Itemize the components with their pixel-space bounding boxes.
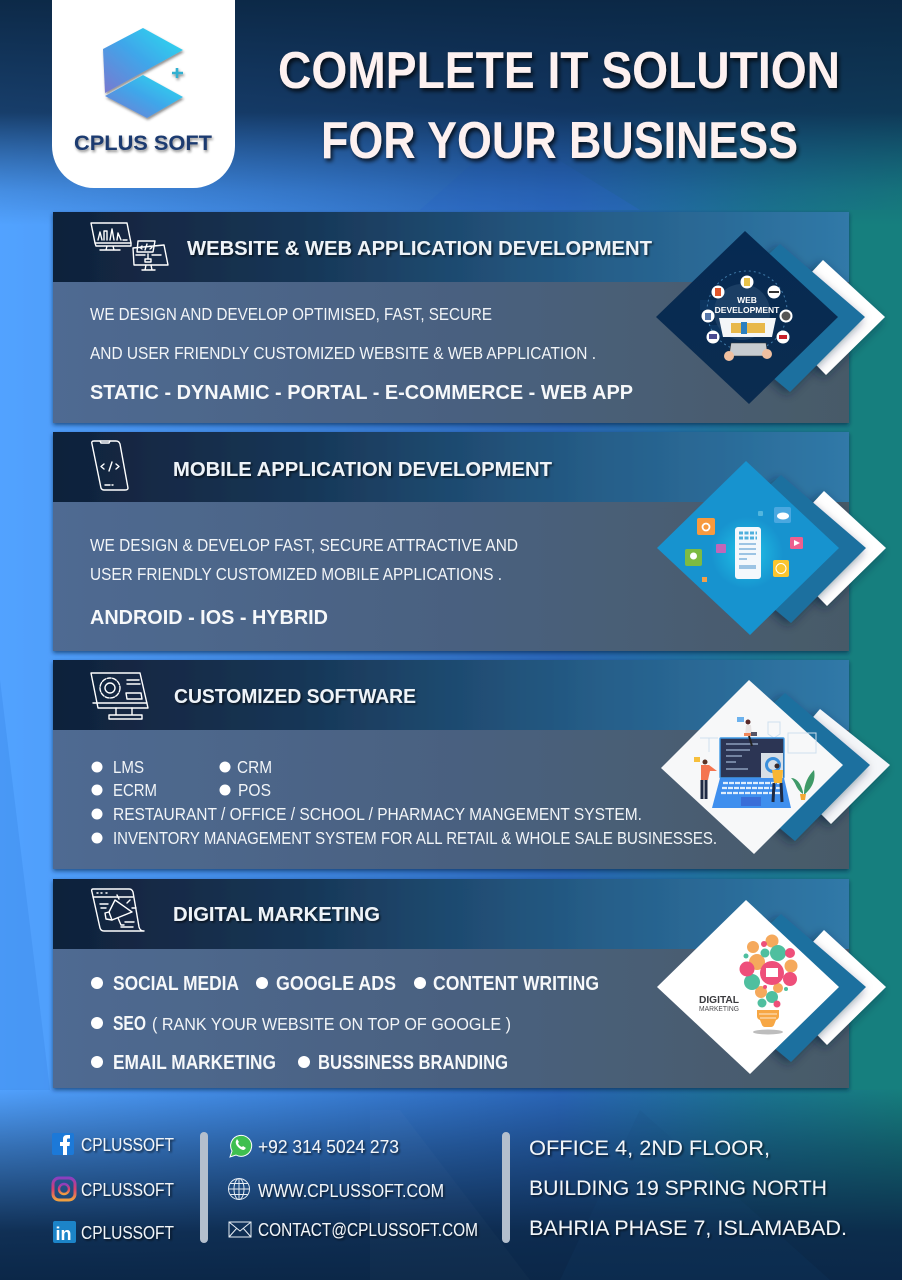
heading: DIGITAL MARKETING <box>173 904 380 926</box>
description: WE DESIGN & DEVELOP FAST, SECURE ATTRACTIVE AND <box>90 535 518 555</box>
software list: RESTAURANT / OFFICE / SCHOOL / PHARMACY MANGEMENT SYSTEM. <box>113 804 642 824</box>
footer: address: OFFICE 4, 2ND FLOOR, <box>529 1137 770 1160</box>
heading: WEBSITE & WEB APPLICATION DEVELOPMENT <box>187 238 652 260</box>
icon: linkedin: in <box>56 1224 72 1244</box>
description: AND USER FRIENDLY CUSTOMIZED WEBSITE & WEB APPLICATION . <box>90 343 596 363</box>
panel background <box>53 660 849 869</box>
software list: CRM <box>237 757 272 777</box>
logo wordmark: CPLUS SOFT <box>74 132 212 155</box>
divider left <box>200 1132 208 1243</box>
logo mark <box>103 28 183 118</box>
marketing services: GOOGLE ADS <box>276 973 396 995</box>
service list: STATIC - DYNAMIC - PORTAL - E-COMMERCE - WEB APP <box>90 382 633 404</box>
software list: ECRM <box>113 780 157 800</box>
panel: customized software <box>53 660 890 869</box>
diamond: web development: DEVELOPMENT <box>715 305 780 315</box>
software list: POS <box>238 780 271 800</box>
icon: facebook <box>52 1133 74 1155</box>
title: COMPLETE IT SOLUTION <box>278 42 840 100</box>
icon: envelope <box>229 1222 251 1237</box>
icon: software monitor <box>91 673 148 719</box>
footer: address <box>529 1137 847 1240</box>
marketing services <box>91 973 599 1074</box>
diamond: digital marketing bulb: DIGITAL <box>699 995 739 1006</box>
diamond: mobile apps <box>657 461 886 635</box>
heading: CUSTOMIZED SOFTWARE <box>174 686 416 708</box>
description <box>90 535 518 584</box>
text: facebook: CPLUSSOFT <box>81 1134 174 1155</box>
text: linkedin: CPLUSSOFT <box>81 1222 174 1243</box>
marketing services: BUSSINESS BRANDING <box>318 1052 508 1074</box>
footer: contact details <box>228 1135 478 1240</box>
diamond: digital marketing bulb <box>657 900 886 1074</box>
diamond: web development <box>656 231 885 404</box>
diamond: digital marketing bulb: MARKETING <box>699 1004 739 1013</box>
title <box>278 42 840 170</box>
description <box>90 304 596 363</box>
panel: digital marketing <box>53 879 886 1088</box>
footer: address: BAHRIA PHASE 7, ISLAMABAD. <box>529 1217 847 1240</box>
text: website: WWW.CPLUSSOFT.COM <box>258 1180 444 1201</box>
text: instagram: CPLUSSOFT <box>81 1179 174 1200</box>
description: WE DESIGN AND DEVELOP OPTIMISED, FAST, SECURE <box>90 304 492 324</box>
software list: INVENTORY MANAGEMENT SYSTEM FOR ALL RETAIL & WHOLE SALE BUSINESSES. <box>113 828 717 848</box>
divider right <box>502 1132 510 1243</box>
heading: MOBILE APPLICATION DEVELOPMENT <box>173 459 552 481</box>
icon: monitors <box>91 223 168 270</box>
marketing services: SEO <box>113 1013 146 1035</box>
software list: LMS <box>113 757 144 777</box>
platform list: ANDROID - IOS - HYBRID <box>90 607 328 629</box>
panel: mobile application development <box>53 432 886 651</box>
diamond: web development: WEB <box>737 295 757 305</box>
marketing services: EMAIL MARKETING <box>113 1052 276 1074</box>
marketing services: ( RANK YOUR WEBSITE ON TOP OF GOOGLE ) <box>152 1014 511 1034</box>
software list <box>92 757 717 848</box>
icon: megaphone window <box>92 889 144 931</box>
text: email: CONTACT@CPLUSSOFT.COM <box>258 1219 478 1240</box>
text: phone: +92 314 5024 273 <box>258 1136 399 1157</box>
footer: address: BUILDING 19 SPRING NORTH <box>529 1177 827 1200</box>
icon: globe <box>228 1178 250 1200</box>
icon: instagram <box>53 1178 75 1200</box>
marketing services: CONTENT WRITING <box>433 973 599 995</box>
title: FOR YOUR BUSINESS <box>321 112 798 170</box>
footer: social links <box>52 1133 174 1244</box>
icon: smartphone <box>92 441 128 490</box>
logo card <box>52 0 235 188</box>
diamond: software team <box>661 680 890 854</box>
icon: whatsapp <box>230 1135 252 1157</box>
panel background <box>53 212 849 423</box>
marketing services: SOCIAL MEDIA <box>113 973 239 995</box>
panel background <box>53 879 849 1088</box>
panel: website and web application development <box>53 212 885 423</box>
panel background <box>53 432 849 651</box>
description: USER FRIENDLY CUSTOMIZED MOBILE APPLICATIONS . <box>90 564 502 584</box>
